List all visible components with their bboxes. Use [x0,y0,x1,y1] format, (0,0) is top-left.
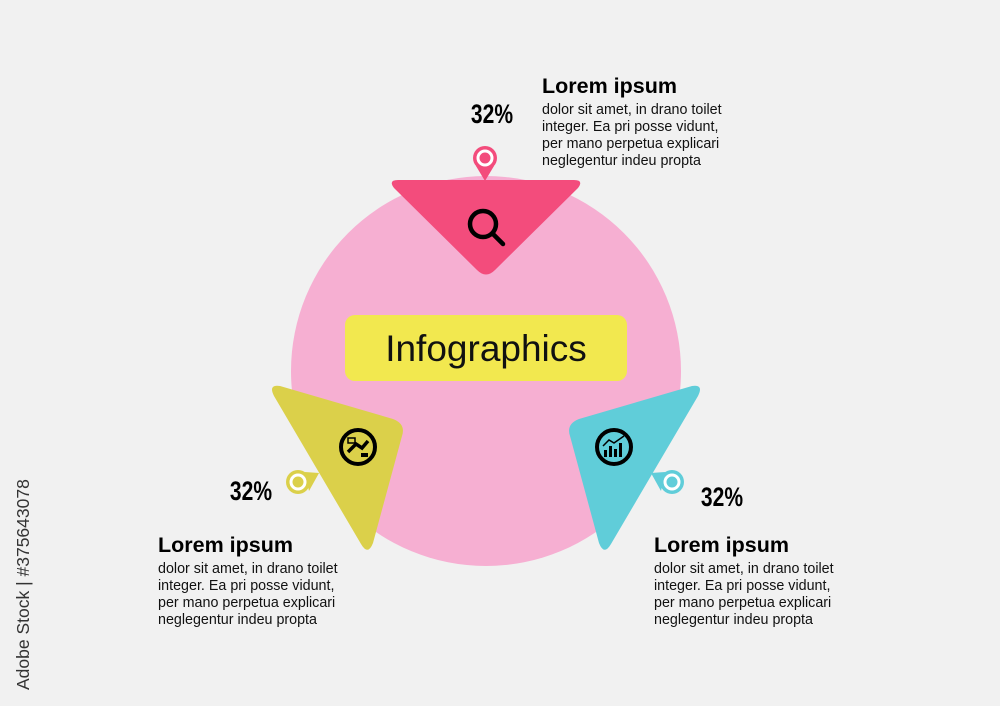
circle background [291,176,681,566]
right triangle segment [569,386,700,550]
top pin [473,146,497,181]
title box: Infographics [385,328,587,369]
text block left: neglegentur indeu propta [158,612,317,628]
text block right: per mano perpetua explicari [654,595,831,611]
text block left: integer. Ea pri posse vidunt, [158,578,334,594]
text block right: Lorem ipsum [654,533,789,557]
text block left [158,533,338,628]
icon: handshake [341,430,375,464]
percent top: 32% [471,100,513,130]
text block right: integer. Ea pri posse vidunt, [654,578,830,594]
text block top: integer. Ea pri posse vidunt, [542,119,718,135]
icon: chart [597,430,631,464]
title box [345,315,627,381]
text block top: dolor sit amet, in drano toilet [542,102,722,118]
left triangle segment [272,386,403,550]
text block right: neglegentur indeu propta [654,612,813,628]
icon: magnifier [470,211,503,244]
text block left: dolor sit amet, in drano toilet [158,561,338,577]
text block right [654,533,834,628]
text block top [542,74,722,169]
top triangle segment [392,180,580,274]
text block top: per mano perpetua explicari [542,136,719,152]
text block left: Lorem ipsum [158,533,293,557]
percent right: 32% [701,483,743,513]
text block right: dolor sit amet, in drano toilet [654,561,834,577]
percent left: 32% [230,477,272,507]
watermark id: Adobe Stock | #375643078 [13,479,33,690]
text block top: Lorem ipsum [542,74,677,98]
text block top: neglegentur indeu propta [542,153,701,169]
right pin [651,470,684,494]
text block left: per mano perpetua explicari [158,595,335,611]
left pin [286,470,319,494]
